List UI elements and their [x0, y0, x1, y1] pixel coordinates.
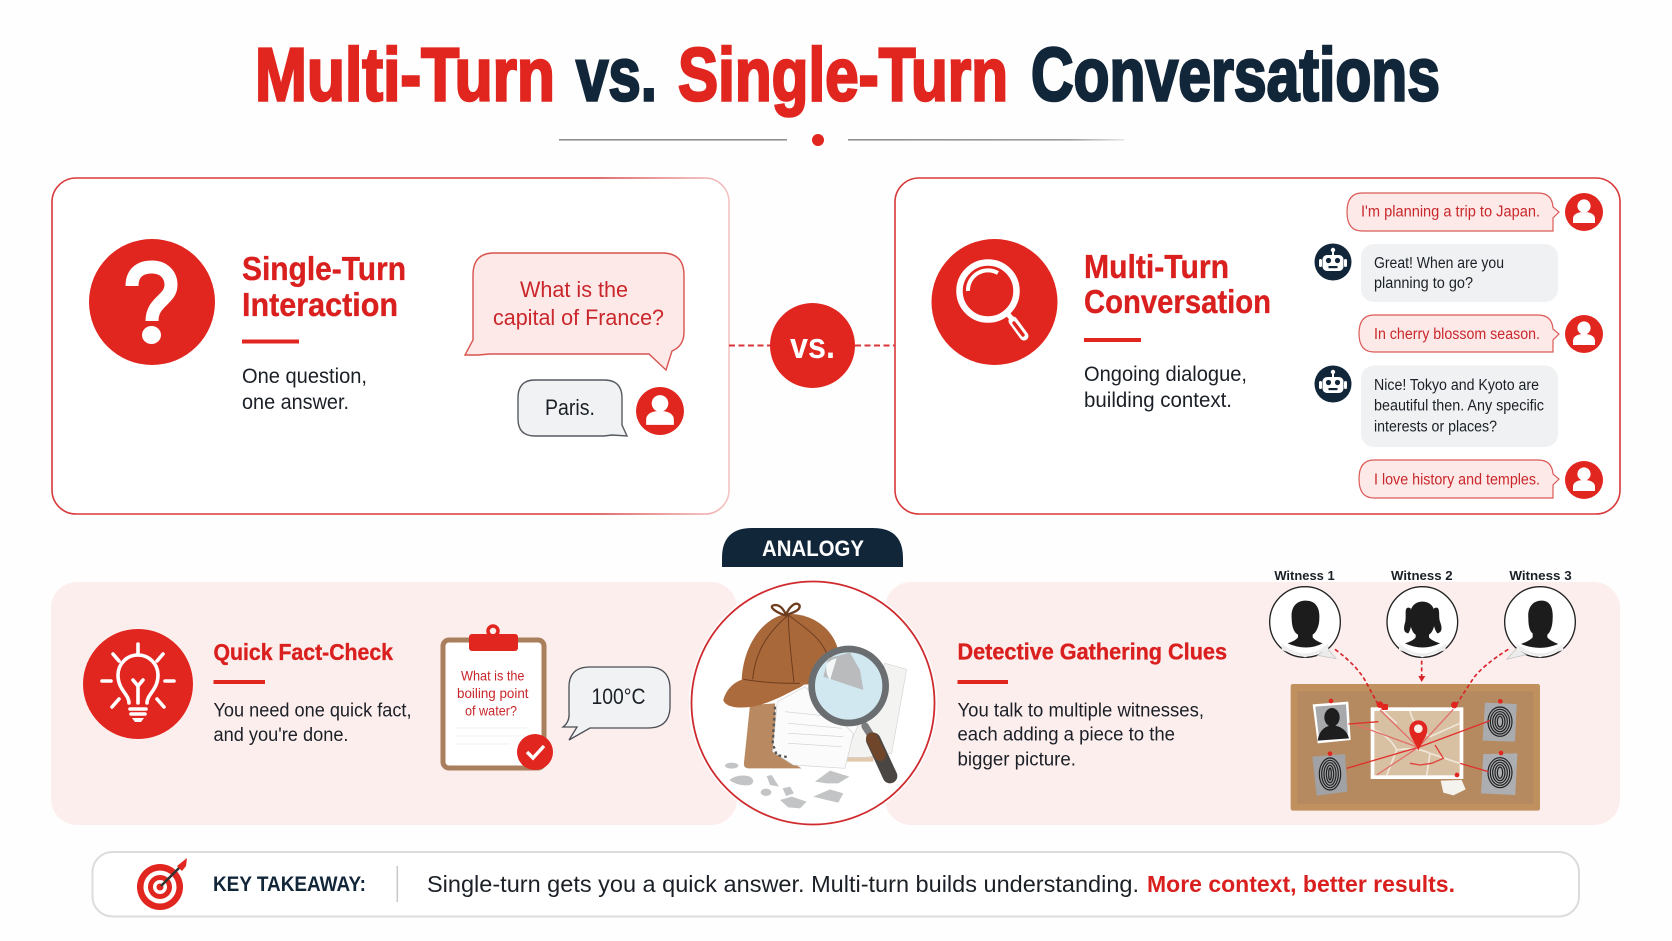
witness 3 — [1505, 568, 1575, 659]
title: vs. — [576, 32, 657, 116]
chat message 2: planning to go? — [1374, 275, 1473, 292]
analogy badge — [722, 528, 903, 567]
title divider — [559, 134, 1124, 146]
description — [1084, 363, 1247, 412]
heading underline — [242, 340, 299, 344]
heading underline — [1084, 338, 1141, 342]
heading: detective gathering clues: Detective Gathering Clues — [958, 638, 1227, 664]
chat message 2: Great! When are you — [1374, 255, 1504, 272]
speech bubble: 100°C: 100°C — [592, 684, 646, 709]
clipboard: What is the — [461, 668, 525, 684]
panel: detective gathering clues — [885, 568, 1620, 825]
clipboard: of water? — [465, 702, 517, 718]
witness 3: Witness 3 — [1509, 568, 1572, 583]
analogy badge: ANALOGY — [762, 536, 864, 561]
icon: bot 2 — [1314, 366, 1352, 402]
speech bubble: question — [465, 253, 684, 370]
magnifier handle — [865, 726, 890, 776]
description — [214, 700, 412, 746]
heading: quick fact-check: Quick Fact-Check — [214, 639, 393, 665]
key takeaway label: KEY TAKEAWAY: — [213, 873, 366, 896]
chat message 5: I love history and temples. — [1374, 472, 1540, 488]
description: one answer. — [242, 391, 349, 414]
magnifier lens — [812, 649, 886, 723]
title — [255, 32, 1440, 116]
icon: lightbulb — [83, 629, 193, 739]
description: Ongoing dialogue, — [1084, 363, 1247, 386]
speech bubble: 100°C — [563, 667, 670, 740]
photo: fingerprint bottom left — [1312, 751, 1347, 796]
heading: single-turn interaction: Interaction — [242, 286, 398, 323]
photo: suspect — [1313, 699, 1351, 743]
chat message 2 — [1361, 244, 1558, 302]
witness 1: Witness 1 — [1274, 568, 1335, 583]
witness 2 — [1387, 568, 1458, 657]
icon: user 1 — [1565, 193, 1603, 231]
chat message 5 — [1359, 460, 1559, 498]
witness 2: Witness 2 — [1391, 568, 1453, 583]
spiral — [773, 707, 788, 757]
cork board — [1291, 684, 1540, 811]
description: You talk to multiple witnesses, — [958, 700, 1204, 722]
icon: magnifying glass — [932, 239, 1058, 365]
speech bubble: question: What is the — [520, 277, 628, 302]
vs connector: vs. — [790, 325, 835, 366]
title: Conversations — [1031, 32, 1440, 116]
chat message 4: interests or places? — [1374, 418, 1497, 436]
chat message 3 — [1359, 315, 1559, 352]
note — [1441, 780, 1466, 795]
panel: quick fact-check — [51, 582, 737, 825]
heading: single-turn interaction: Single-Turn — [242, 250, 406, 287]
description — [242, 365, 367, 414]
title: Single-Turn — [678, 32, 1008, 116]
icon: user — [636, 387, 684, 435]
clipboard — [443, 626, 553, 770]
string pins — [1377, 701, 1459, 777]
panel: single-turn interaction — [52, 178, 729, 514]
analogy illustration circle — [689, 579, 937, 827]
speech bubble: question: capital of France? — [493, 305, 664, 330]
takeaway emphasis: More context, better results. — [1147, 871, 1455, 897]
heading: single-turn interaction — [242, 250, 406, 323]
clipboard: boiling point — [457, 685, 529, 701]
illustration: detective hat, notebook and magnifier — [723, 604, 907, 808]
heading: multi-turn conversation: Conversation — [1084, 283, 1271, 320]
icon: target — [137, 858, 187, 910]
description: and you're done. — [214, 725, 348, 746]
vs connector — [729, 303, 895, 388]
back sheet — [847, 663, 907, 757]
hat — [723, 604, 838, 708]
icon: bot 1 — [1314, 244, 1352, 280]
footprints — [725, 763, 849, 808]
heading underline — [214, 680, 265, 684]
heading: multi-turn conversation — [1084, 248, 1271, 320]
evidence board with witnesses — [1270, 568, 1575, 811]
arrowhead — [1418, 676, 1425, 682]
icon: user 3 — [1565, 461, 1603, 499]
heading: multi-turn conversation: Multi-Turn — [1084, 248, 1229, 285]
pages — [773, 687, 853, 768]
chat message 4 — [1361, 366, 1558, 447]
heading underline — [958, 680, 1008, 684]
chat message 3: In cherry blossom season. — [1374, 326, 1540, 343]
icon: user 2 — [1565, 315, 1603, 353]
chat message 4: Nice! Tokyo and Kyoto are — [1374, 377, 1539, 394]
chat message 4: beautiful then. Any specific — [1374, 398, 1544, 414]
notebook cover — [744, 703, 802, 768]
description: bigger picture. — [958, 750, 1076, 770]
icon: question mark — [89, 239, 215, 365]
witness 1 — [1270, 568, 1340, 659]
description: building context. — [1084, 389, 1232, 412]
speech bubble: answer: Paris. — [545, 395, 595, 420]
chat message 1: I'm planning a trip to Japan. — [1361, 204, 1540, 220]
panel: multi-turn conversation — [895, 178, 1620, 514]
red strings — [1347, 709, 1490, 775]
title: Multi-Turn — [255, 32, 555, 116]
description: each adding a piece to the — [958, 724, 1175, 746]
key takeaway bar — [92, 852, 1579, 916]
description — [958, 700, 1204, 770]
icon: map pin — [1409, 720, 1427, 751]
description: One question, — [242, 365, 367, 388]
arrows from witnesses to board — [1335, 649, 1508, 707]
photo: fingerprint top right — [1483, 699, 1517, 742]
description: You need one quick fact, — [214, 700, 412, 722]
takeaway sentence: Single-turn gets you a quick answer. Multi-turn builds understanding. — [427, 871, 1139, 897]
photo: fingerprint bottom right — [1481, 751, 1517, 795]
speech bubble: answer — [518, 380, 627, 436]
map — [1371, 707, 1463, 779]
chat message 1 — [1347, 193, 1559, 231]
